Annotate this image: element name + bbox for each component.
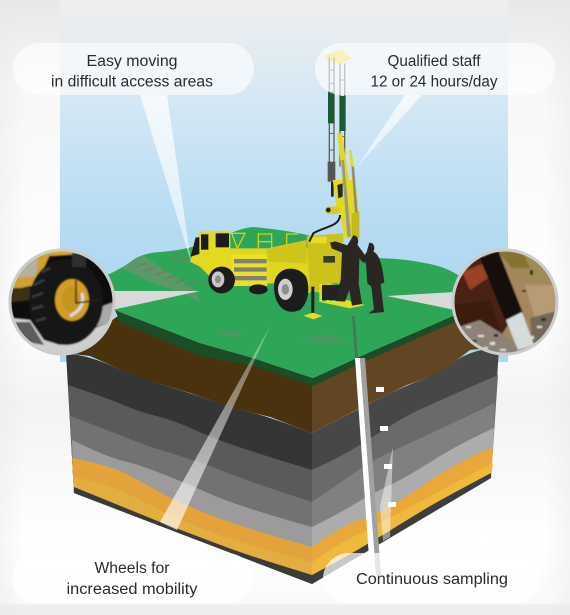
hydraulic hose [309, 215, 340, 242]
pipe [480, 250, 523, 322]
callout text: Qualified staff [388, 53, 481, 70]
rim [55, 279, 89, 321]
beam: wheels [160, 322, 272, 530]
under-rig legs [319, 283, 329, 302]
soil layer: dark rock [66, 347, 499, 584]
soil layer: orange sand [72, 447, 493, 584]
sky backdrop [60, 0, 508, 362]
callout text: Wheels for [94, 560, 170, 577]
callout: qualified staff [315, 43, 555, 95]
mast [325, 49, 359, 238]
mast lattice [329, 57, 345, 167]
callout: wheels [12, 553, 253, 604]
callout: easy moving [13, 43, 254, 95]
rear hidden wheel [249, 284, 268, 294]
soil layer: grey rock [70, 403, 495, 584]
drill line on grass [352, 316, 358, 358]
pointer: left photo [112, 291, 200, 310]
workers silhouettes [330, 235, 384, 314]
drill pipe underground [355, 358, 381, 575]
callout text: increased mobility [66, 581, 198, 598]
callout text [51, 53, 213, 90]
tyre [29, 259, 103, 345]
ground surface [100, 227, 470, 386]
chassis [230, 248, 310, 293]
callout text: Easy moving [86, 53, 178, 70]
callout: continuous sampling [323, 553, 540, 604]
truck body [190, 215, 365, 319]
soil layer: yellow sand [73, 463, 493, 584]
drill rig [190, 49, 384, 319]
pointer: right photo [387, 292, 455, 310]
beam: moving [140, 95, 191, 262]
callout text: 12 or 24 hours/day [370, 74, 498, 90]
wheels [208, 267, 308, 312]
mast green cylinders [328, 92, 334, 123]
callout text: in difficult access areas [51, 74, 213, 90]
photo: drill pipe close-up [450, 248, 560, 360]
worker at controls [330, 235, 367, 306]
soil layer: brown topsoil [66, 316, 499, 433]
mast crown [325, 49, 352, 64]
soil layer: mid grey rock [68, 375, 498, 584]
beam: continuous sampling [380, 447, 393, 541]
cab yellow [13, 252, 51, 290]
mast grey block [328, 162, 335, 182]
rails [230, 233, 298, 248]
soil layer: bedrock [74, 473, 491, 584]
callout text: Continuous sampling [356, 571, 508, 588]
rear housing [307, 233, 343, 293]
wheel tracks on grass [122, 254, 345, 343]
ground and snow [14, 317, 108, 352]
grass edge [115, 310, 455, 386]
rear jack [311, 287, 314, 316]
standing worker [363, 243, 384, 314]
beam: staff [357, 95, 422, 167]
soil layer: light grey rock [72, 428, 494, 584]
callout text [66, 560, 198, 598]
engine grille [231, 254, 267, 286]
photo: tyre close-up [8, 248, 116, 360]
core samples [376, 387, 489, 539]
drill string [352, 316, 489, 575]
cab [190, 231, 232, 287]
green grass top [100, 227, 470, 378]
front wheel [208, 267, 235, 293]
rig platform [318, 300, 365, 308]
mast yellow frame [333, 133, 359, 238]
rear wheel [274, 269, 308, 312]
soil block [66, 316, 499, 584]
callout text [370, 53, 498, 90]
